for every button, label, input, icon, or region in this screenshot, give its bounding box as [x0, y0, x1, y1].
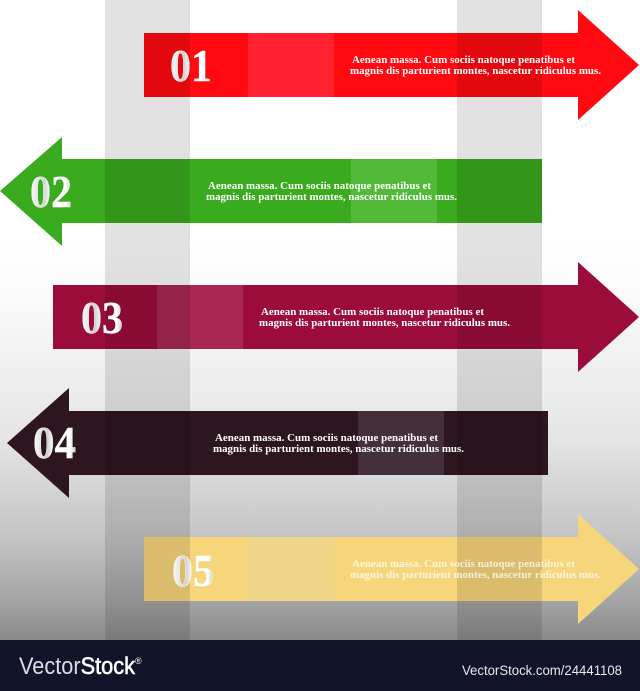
arrow 2: green	[0, 137, 542, 246]
arrow 5: yellow	[144, 514, 639, 624]
text block 4	[213, 433, 465, 455]
number 01: 01	[170, 41, 212, 91]
number 04: 04	[33, 418, 76, 468]
footer image id: VectorStock.com/24441108	[462, 663, 622, 678]
text block 3: magnis dis parturient montes, nascetur ridiculus mus.	[259, 318, 511, 329]
footer bar	[0, 640, 640, 691]
text block 4: Aenean massa. Cum sociis natoque penatibus et	[215, 433, 439, 444]
text block 2: magnis dis parturient montes, nascetur ridiculus mus.	[206, 192, 458, 203]
text block 5	[350, 559, 602, 581]
text block 2: Aenean massa. Cum sociis natoque penatibus et	[208, 181, 432, 192]
text block 1: magnis dis parturient montes, nascetur ridiculus mus.	[350, 66, 602, 77]
text block 1	[350, 55, 602, 77]
text block 3: Aenean massa. Cum sociis natoque penatibus et	[261, 307, 485, 318]
number 05: 05	[172, 546, 214, 596]
vertical translucent strip: right	[457, 0, 542, 640]
arrow 4: dark plum	[7, 388, 548, 498]
text block 4: magnis dis parturient montes, nascetur ridiculus mus.	[213, 444, 465, 455]
text block 2	[206, 181, 458, 203]
text block 5: magnis dis parturient montes, nascetur ridiculus mus.	[350, 570, 602, 581]
text block 3	[259, 307, 511, 329]
footer logo: VectorStock	[19, 653, 136, 680]
arrow 3: crimson	[53, 262, 639, 372]
text block 1: Aenean massa. Cum sociis natoque penatibus et	[352, 55, 576, 66]
text block 5: Aenean massa. Cum sociis natoque penatibus et	[352, 559, 576, 570]
footer logo: ®	[135, 656, 142, 666]
arrow 1: red	[144, 10, 639, 120]
vertical translucent strip: left	[105, 0, 190, 640]
number 03: 03	[81, 293, 123, 343]
number 02: 02	[30, 167, 72, 217]
